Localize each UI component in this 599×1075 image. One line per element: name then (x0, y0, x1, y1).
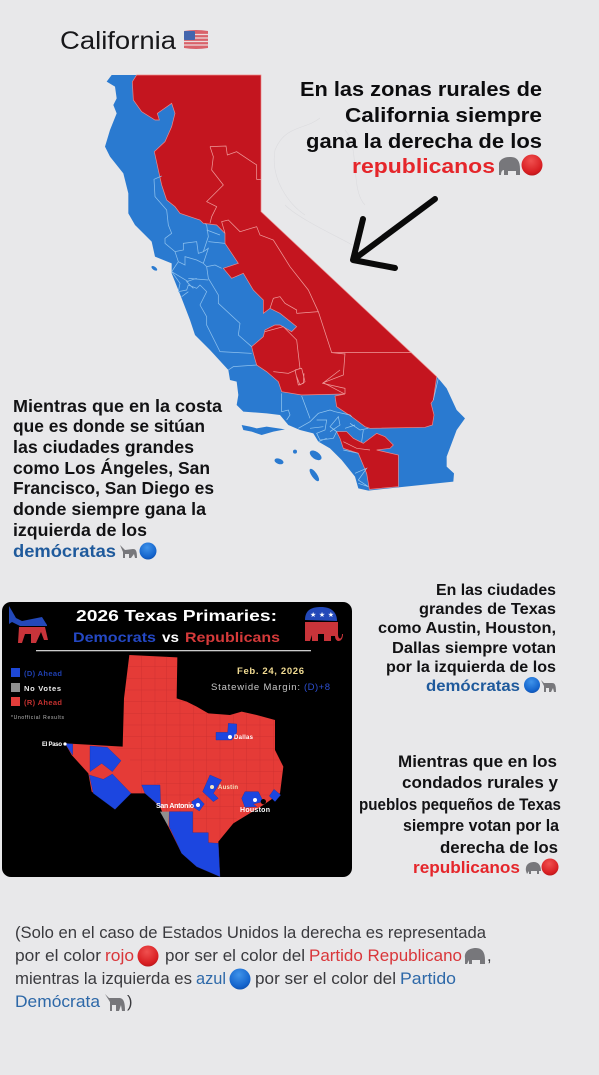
text block: Texas rural: pueblos pequeños de Texas (359, 795, 561, 814)
text block: colour note: (Solo en el caso de Estados Unidos la derecha es representada (15, 924, 487, 942)
text block: Texas cities (378, 582, 556, 695)
text block: Texas cities: Dallas siempre votan (392, 640, 556, 657)
text block: rural California (300, 78, 542, 178)
text block: colour note: mientras la izquierda es (15, 970, 192, 988)
icon: red circle (542, 858, 558, 876)
text block: colour note: Partido Republicano (309, 947, 462, 965)
heading: Texas primaries: Democrats (73, 629, 156, 645)
text block: coast: como Los Ángeles, San (13, 457, 210, 478)
text block: rural California: En las zonas rurales de (300, 78, 542, 101)
icon: US flag (184, 30, 208, 49)
icon: donkey (120, 545, 137, 558)
icon: red circle (138, 946, 158, 966)
text block: rural California: California siempre (345, 104, 542, 127)
date and margin: Feb. 24, 2026 (237, 666, 304, 677)
icon: Republican elephant (305, 607, 343, 641)
text block: coast: izquierda de los (13, 520, 147, 540)
text block: Texas cities: demócratas (426, 678, 520, 695)
city labels: San Antonio (156, 803, 194, 810)
date and margin (211, 666, 330, 693)
Galveston bay (261, 799, 266, 804)
text block: Texas rural (359, 752, 561, 877)
text block: coast (13, 396, 222, 561)
text block: coast: demócratas (13, 541, 116, 561)
city labels: Houston (240, 807, 270, 814)
text block: colour note: ) (127, 993, 132, 1011)
county borders on blue: central coast (154, 176, 257, 370)
icon: donkey (541, 680, 556, 692)
republican red counties south (337, 432, 398, 489)
city labels: El Paso (42, 742, 62, 748)
text block: colour note: azul (196, 970, 226, 988)
text block: colour note: por ser el color del (165, 947, 305, 965)
islands (242, 425, 323, 483)
icon: donkey (105, 994, 125, 1011)
legend: *Unofficial Results (11, 715, 64, 721)
text block: colour note: Demócrata (15, 993, 101, 1011)
text block: rural California: gana la derecha de los (306, 130, 542, 153)
text block: Texas cities: En las ciudades (436, 582, 556, 599)
city labels: Dallas (234, 735, 254, 741)
icon: blue circle (524, 677, 540, 693)
text block: Texas cities: grandes de Texas (419, 601, 556, 618)
heading: Texas primaries: 2026 Texas Primaries: (76, 608, 277, 625)
text block: Texas cities: por la izquierda de los (386, 659, 556, 676)
legend: No Votes (24, 684, 61, 693)
city labels: Austin (218, 785, 238, 791)
faint ghost sketch behind the heading (274, 118, 365, 245)
text block: Texas cities: como Austin, Houston, (378, 620, 556, 637)
date and margin: (D)+8 (304, 682, 330, 693)
text block: Texas rural: Mientras que en los (398, 752, 557, 771)
text block: rural California: republicanos (352, 155, 495, 178)
map: Texas counties (65, 655, 283, 877)
text block: coast: las ciudades grandes (13, 437, 194, 457)
no votes county (160, 812, 169, 827)
text block: coast: Mientras que en la costa (13, 396, 222, 416)
republican red counties north and inland (132, 75, 437, 428)
title: California: California (60, 27, 176, 55)
icon: Democratic donkey (9, 606, 48, 643)
icon: blue circle (230, 968, 250, 990)
text block: Texas rural: condados rurales y (402, 773, 559, 792)
Democratic counties (65, 723, 281, 877)
text block: colour note: , (487, 947, 492, 965)
heading: Texas primaries: Republicans (185, 629, 280, 645)
coast blue base (105, 75, 465, 491)
text block: colour note: por ser el color del (255, 970, 396, 988)
heading: Texas primaries: vs (162, 629, 179, 645)
map: California counties (105, 75, 465, 491)
text block: coast: donde siempre gana la (13, 499, 206, 519)
text block: colour note (15, 924, 492, 1011)
heading: Texas primaries (73, 608, 280, 645)
text block: colour note: por el color (15, 947, 102, 965)
county borders on blue: southern California (282, 378, 438, 487)
icon: elephant (465, 948, 485, 964)
legend (11, 668, 64, 721)
text block: colour note: rojo (105, 947, 134, 965)
icon: Republican elephant: ★★★ (310, 611, 334, 619)
arrow pointing to rural California (353, 199, 435, 268)
legend: (R) Ahead (24, 698, 62, 707)
panel: Texas primaries map (2, 602, 352, 877)
text block: Texas rural: derecha de los (440, 838, 558, 857)
icon: elephant (499, 157, 520, 175)
text block: colour note: Partido (400, 970, 456, 988)
red county detail south (295, 370, 370, 450)
county borders on red (207, 146, 412, 430)
text block: coast: Francisco, San Diego es (13, 478, 214, 498)
text block: Texas rural: siempre votan por la (403, 816, 560, 835)
text block: Texas rural: republicanos (413, 858, 520, 877)
text block: coast: que es donde se sitúan (13, 416, 205, 436)
icon: elephant (526, 862, 541, 874)
icon: blue circle (140, 542, 156, 560)
legend: (D) Ahead (24, 669, 62, 678)
date and margin: Statewide Margin: (211, 682, 300, 693)
city labels (42, 735, 270, 814)
icon: red circle (522, 154, 542, 176)
